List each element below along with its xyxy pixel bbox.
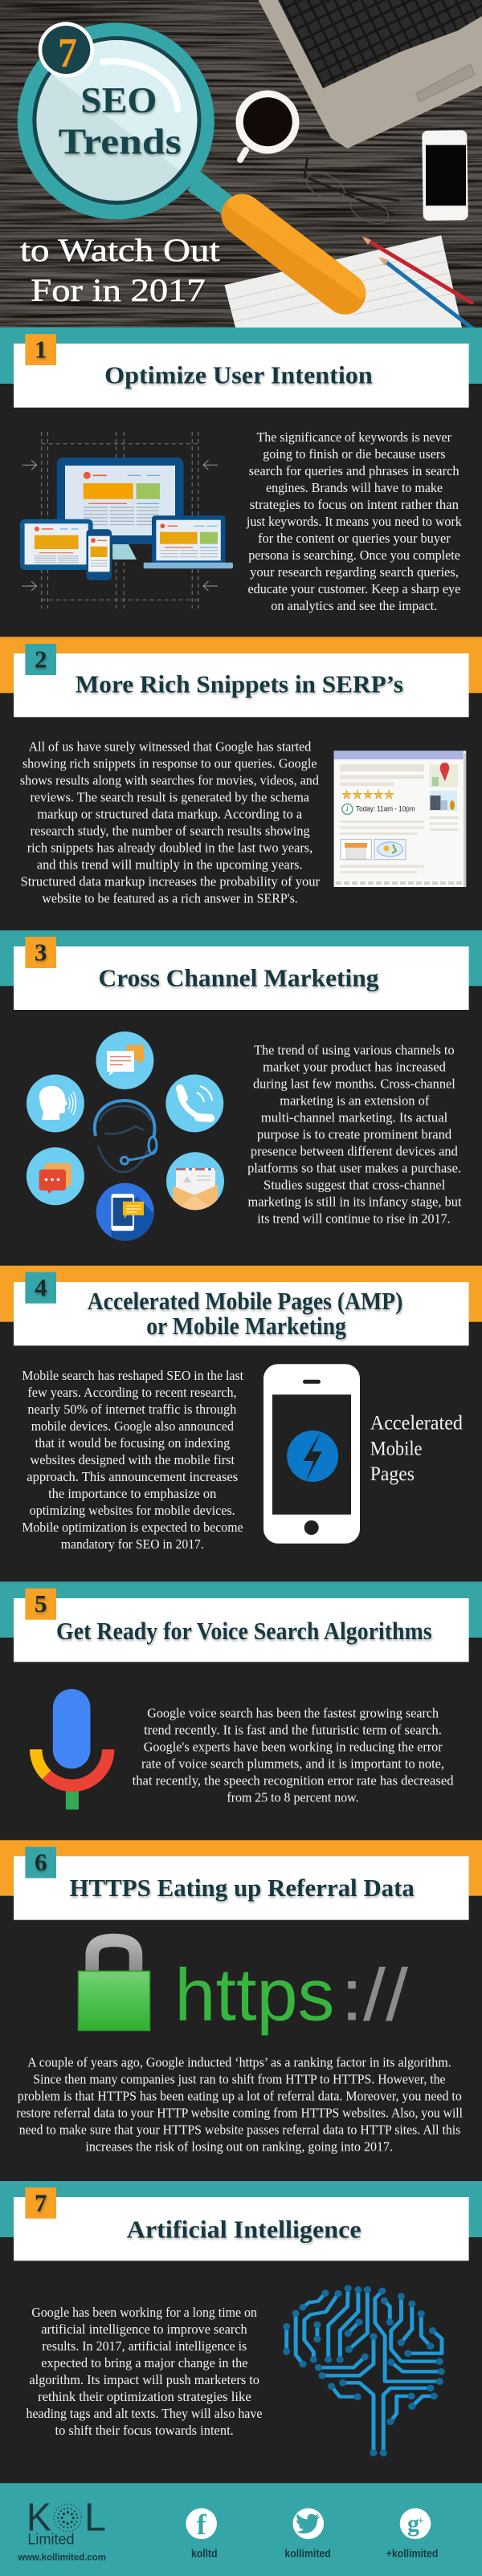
heading: Get Ready for Voice Search Algorithms — [56, 1617, 432, 1645]
number badge 7: 7 — [35, 2188, 47, 2217]
heading — [88, 1287, 402, 1340]
heading: Accelerated Mobile Pages (AMP) — [88, 1287, 402, 1315]
text block: approach. This announcement increases — [27, 1469, 238, 1484]
title: SEO Trends — [59, 79, 182, 162]
text block: purpose is to create prominent brand — [257, 1127, 452, 1142]
heading: Cross Channel Marketing — [98, 963, 379, 991]
text block: results. In 2017, artificial intelligence is — [42, 2338, 247, 2354]
social: facebook — [186, 2508, 218, 2560]
heading: HTTPS Eating up Referral Data — [69, 1874, 415, 1902]
label: accelerated mobile pages: Mobile — [370, 1438, 423, 1459]
text block: Structured data markup increases the probability of your — [21, 874, 320, 889]
https label: :// — [341, 1955, 408, 2037]
notebook — [224, 235, 462, 328]
label: accelerated mobile pages: Pages — [370, 1463, 415, 1485]
text block — [246, 429, 463, 613]
text block: for the content or queries your buyer — [258, 531, 451, 546]
text block: nearly 50% of internet traffic is through — [27, 1402, 237, 1417]
text block: markup or structured data markup. According to a — [37, 807, 303, 822]
text block: Google has been working for a long time on — [31, 2305, 257, 2320]
title: SEO Trends: SEO — [80, 79, 157, 120]
number badge 6 — [25, 1847, 56, 1878]
text block: showing rich snippets in response to our queries. Google — [22, 756, 317, 771]
text block: Mobile search has reshaped SEO in the last — [22, 1368, 243, 1383]
heading: Optimize User Intention — [104, 360, 373, 389]
text block: persona is searching. Once you complete — [248, 547, 460, 563]
image: rich snippet result: ★★★★★ — [341, 787, 394, 802]
text block: multi-channel marketing. Its actual — [261, 1110, 448, 1125]
text block: shows results along with searches for movies, videos, and — [20, 773, 320, 788]
text block: few years. According to recent research, — [27, 1385, 237, 1400]
icon: phone call — [165, 1074, 223, 1132]
text block: mandatory for SEO in 2017. — [61, 1536, 204, 1552]
subtitle: to Watch Out — [20, 232, 220, 268]
text block: just keywords. It means you need to work — [246, 514, 463, 529]
icon: mobile chat — [96, 1183, 154, 1241]
text block: rethink their optimization strategies like — [38, 2389, 251, 2404]
number badge 6: 6 — [35, 1848, 47, 1876]
text block — [26, 2305, 262, 2438]
panel: 3 cross channel marketing — [0, 930, 482, 1266]
text block: problem is that HTTPS has been eating up a lot of referral data. Moreover, you need to — [18, 2089, 462, 2104]
number badge 3: 3 — [35, 938, 47, 967]
social: facebook: kolltd — [191, 2547, 218, 2560]
text block: on analytics and see the impact. — [271, 598, 437, 613]
text block: optimizing websites for mobile devices. — [30, 1503, 235, 1518]
panel: 4 accelerated mobile pages — [0, 1266, 482, 1582]
red pencil — [362, 236, 472, 303]
heading: or Mobile Marketing — [146, 1312, 346, 1340]
text block: search for queries and phrases in search — [249, 463, 460, 478]
text block: strategies to focus on intent rather than — [250, 497, 459, 512]
image: rich snippet result: Today: 11am - 10pm — [356, 805, 415, 813]
icon: microphone — [36, 1689, 108, 1809]
text block: from 25 to 8 percent now. — [227, 1789, 359, 1805]
number badge 1 — [25, 334, 56, 365]
icon: circuit brain — [283, 2285, 445, 2456]
number badge 5 — [25, 1589, 56, 1620]
text block: restore referral data to your HTTP website coming from HTTPS websites. Also, you will — [16, 2106, 463, 2121]
text block — [22, 1368, 243, 1552]
text block: artificial intelligence to improve search — [41, 2322, 247, 2337]
text block: websites designed with the mobile first — [31, 1452, 235, 1467]
text block: marketing is still in its infancy stage, but — [247, 1194, 462, 1210]
logo: KOL Limited: www.kollimited.com — [17, 2551, 106, 2562]
heading: More Rich Snippets in SERP’s — [76, 670, 403, 698]
heading: Artificial Intelligence — [127, 2216, 362, 2244]
text block: Mobile optimization is expected to become — [22, 1520, 243, 1535]
text block — [20, 739, 320, 906]
badge: 7: 7 — [58, 31, 77, 76]
text block: marketing is an extension of — [280, 1093, 430, 1109]
magnifier handle — [187, 171, 345, 294]
text block: Since then many companies just ran to shift from HTTP to HTTPS. However, the — [33, 2072, 446, 2087]
number badge 4 — [25, 1272, 56, 1304]
text block: during last few months. Cross-channel — [253, 1076, 455, 1092]
text block: A couple of years ago, Google inducted ‘https’ as a ranking factor in its algorithm. — [27, 2055, 451, 2070]
text block: that recently, the speech recognition error rate has decreased — [133, 1772, 454, 1788]
number badge 3 — [25, 937, 56, 968]
logo: KOL Limited: Limited — [27, 2531, 75, 2548]
label: accelerated mobile pages: Accelerated — [370, 1413, 463, 1435]
text block: algorithm. Its impact will push marketers to — [29, 2372, 259, 2387]
text block: Studies suggest that cross-channel — [263, 1178, 446, 1193]
text block: its trend will continue to rise in 2017. — [257, 1211, 451, 1227]
smartphone — [422, 130, 468, 221]
social: facebook: f — [197, 2509, 207, 2541]
badge: 7 — [39, 22, 94, 78]
title: SEO Trends: Trends — [59, 121, 182, 162]
text block: increases the risk of losing out on ranking, going into 2017. — [85, 2139, 393, 2155]
magnifier lens — [18, 22, 214, 220]
glasses — [302, 158, 399, 229]
text block: trend recently. It is fast and the futuristic term of search. — [144, 1722, 442, 1737]
number badge 4: 4 — [35, 1273, 47, 1301]
panel: 7 artificial intelligence — [0, 2181, 482, 2484]
text block: rate of voice search plummets, and it is important to note, — [141, 1756, 444, 1771]
subtitle — [20, 232, 220, 308]
image: rich snippet result — [334, 751, 466, 887]
https label: https — [174, 1955, 334, 2037]
icon: chat bubbles — [96, 1032, 153, 1089]
social: google plus: + — [418, 2514, 424, 2526]
text block: rich snippets has already doubled in the last two years, — [27, 840, 312, 856]
label: accelerated mobile pages — [370, 1413, 463, 1485]
text block — [133, 1705, 454, 1805]
text block: to shift their focus towards intent. — [55, 2423, 234, 2438]
https label — [174, 1955, 408, 2037]
icon: green padlock — [79, 1940, 149, 2031]
logo: KOL Limited: L — [84, 2497, 106, 2540]
text block: engines. Brands will have to make — [266, 480, 443, 495]
text block — [247, 1043, 462, 1227]
text block: educate your customer. Keep a sharp eye — [247, 581, 460, 596]
text block: and this trend will multiply in the upcoming years. — [37, 857, 303, 873]
number badge 7 — [25, 2187, 56, 2219]
text block: the importance to emphasize on — [48, 1486, 216, 1501]
text block: that it would be focusing on indexing — [35, 1435, 230, 1451]
text block: website to be featured as a rich answer in SERP's. — [42, 891, 298, 906]
social: twitter — [284, 2508, 331, 2560]
number badge 1: 1 — [35, 336, 47, 364]
text block: mobile devices. Google also announced — [31, 1418, 235, 1434]
panel: 5 voice search — [0, 1581, 482, 1840]
panel: 2 more rich snippets — [0, 637, 482, 930]
text block — [16, 2055, 463, 2155]
logo: KOL Limited — [17, 2497, 106, 2562]
logo: KOL Limited: K — [27, 2497, 51, 2540]
text block: The significance of keywords is never — [257, 429, 451, 445]
text block: All of us have surely witnessed that Google has started — [29, 739, 312, 755]
text block: need to make sure that your HTTPS website passes referral data to HTTP sites. All this — [19, 2122, 460, 2138]
laptop — [259, 0, 482, 149]
blue pencil — [378, 257, 476, 331]
panel: hero — [0, 0, 482, 331]
text block: research study, the number of search results showing — [31, 824, 310, 839]
text block: expected to bring a major change in the — [41, 2355, 248, 2370]
social: twitter: kollimited — [284, 2547, 331, 2560]
social: google plus: g — [407, 2510, 419, 2537]
text block: platforms so that user makes a purchase. — [247, 1161, 461, 1176]
text block: going to finish or die because users — [263, 446, 445, 462]
text block: The trend of using various channels to — [254, 1043, 455, 1058]
number badge 2 — [25, 644, 56, 675]
icon: smartphone with AMP logo — [263, 1364, 360, 1544]
icon: envelope — [166, 1152, 224, 1212]
subtitle: For in 2017 — [31, 272, 206, 308]
text block: Google's experts have been working in reducing the error — [144, 1739, 443, 1754]
text block: market your product has increased — [263, 1060, 447, 1075]
text block: heading tags and alt texts. They will also have — [26, 2406, 262, 2421]
icon: messaging — [27, 1147, 84, 1205]
text block: reviews. The search result is generated by the schema — [31, 790, 310, 805]
number badge 2: 2 — [35, 645, 47, 673]
number badge 5: 5 — [35, 1589, 47, 1618]
icon: support agent headset — [95, 1101, 157, 1172]
text block: your research regarding search queries, — [250, 564, 459, 580]
wood desk background — [0, 0, 482, 328]
text block: presence between different devices and — [251, 1144, 459, 1159]
panel: footer — [0, 2483, 482, 2576]
panel: 6 https — [0, 1840, 482, 2181]
icon: speaking head — [27, 1074, 84, 1132]
panel: 1 optimize user intention — [0, 328, 482, 637]
coffee cup — [236, 90, 299, 160]
social: google plus: +kollimited — [386, 2547, 438, 2560]
social: google plus — [386, 2508, 438, 2560]
icon: responsive devices — [20, 432, 233, 608]
text block: Google voice search has been the fastest growing search — [147, 1705, 439, 1720]
